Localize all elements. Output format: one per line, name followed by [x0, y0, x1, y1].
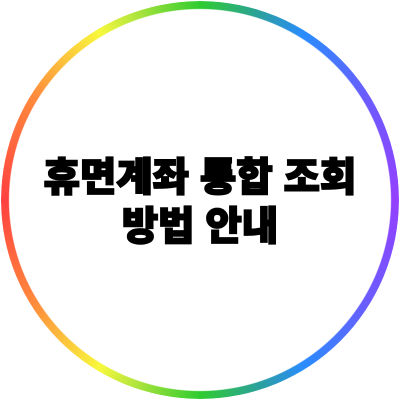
- title: 방법 안내: [122, 205, 278, 249]
- title: [44, 156, 356, 249]
- title: 휴면계좌 통합 조회: [44, 156, 356, 200]
